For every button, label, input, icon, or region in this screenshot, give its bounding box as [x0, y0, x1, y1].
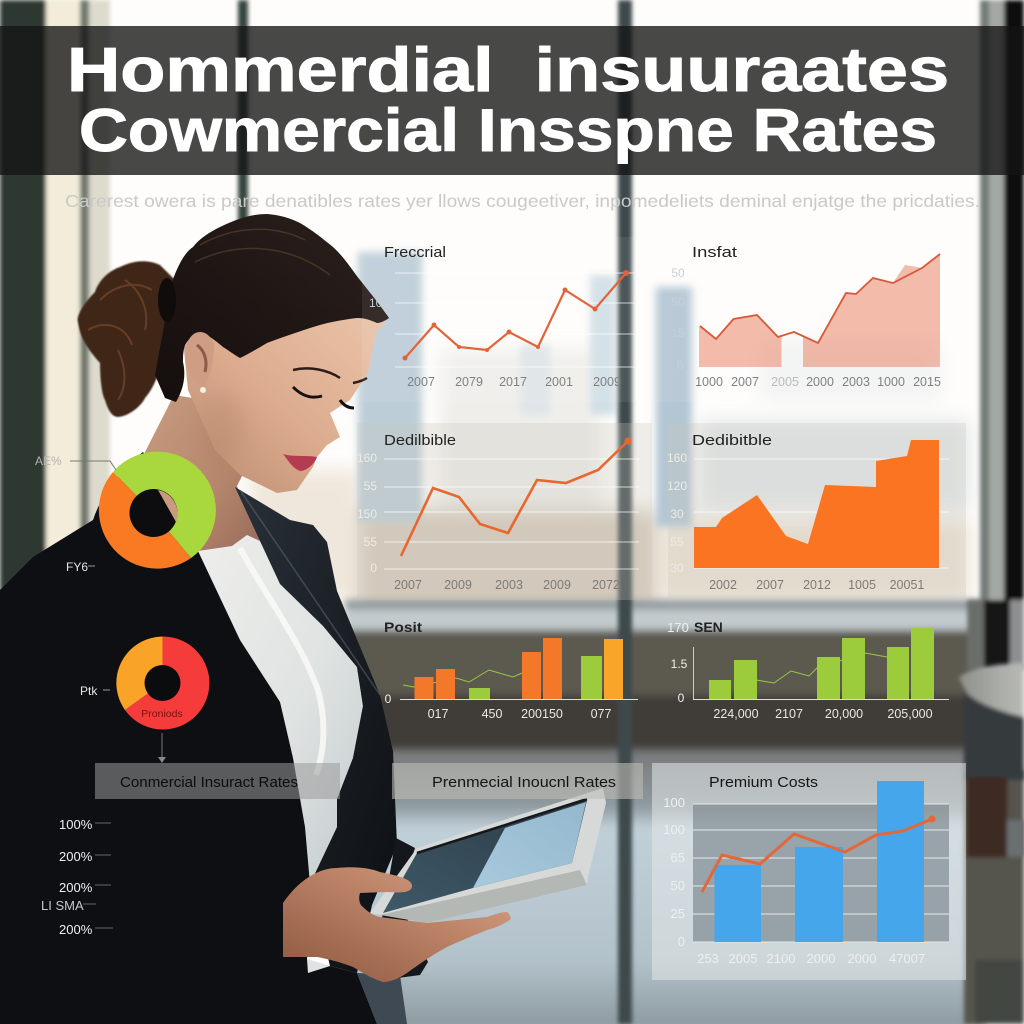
panel: Dedibitble area chart: Dedibitble	[692, 432, 772, 449]
donut chart: amber and red	[116, 636, 209, 729]
panel: Insfat area chart: 1000	[695, 375, 723, 389]
panel: SEN bar chart: 205,000	[887, 707, 933, 721]
person	[0, 214, 606, 1024]
arrow: donut to caption	[158, 733, 166, 763]
panel: Dedibitble area chart: 30	[670, 507, 684, 521]
panel: Posit bar chart: 077	[591, 707, 611, 721]
panel: Dedilbible line chart: 2009	[543, 578, 571, 592]
panel: SEN bar chart: 170	[667, 620, 689, 635]
callout: FY6: FY6	[66, 560, 88, 574]
percent legend: 200%	[59, 849, 93, 864]
panel: Premium Costs chart: 50	[671, 878, 685, 893]
panel: Freccrial line chart: 2079	[455, 375, 483, 389]
callout: AE%: AE%	[35, 454, 62, 468]
panel: Dedibitble area chart: 160	[667, 451, 687, 465]
panel: Freccrial line chart: 2009	[593, 375, 621, 389]
caption band: Commercial Insuract Rates	[95, 763, 340, 799]
panel: Freccrial line chart: 2017	[499, 375, 527, 389]
panel: Insfat area chart: 6	[677, 358, 684, 372]
callout: Ptk: Ptk	[80, 684, 98, 698]
percent legend: 100%	[59, 817, 93, 832]
panel: Premium Costs chart	[652, 763, 966, 980]
panel: SEN bar chart	[667, 619, 949, 721]
hair sheen	[195, 229, 330, 275]
caption band: Premium Inoucnl Rates: Prenmecial Inoucnl Rates	[432, 774, 616, 791]
panel: Insfat area chart: 1000	[877, 375, 905, 389]
panel: Premium Costs chart: 0	[678, 934, 685, 949]
lips	[283, 454, 317, 471]
panel: Insfat area chart: Insfat	[692, 244, 738, 261]
panel: Posit bar chart: 450	[482, 707, 502, 721]
panel: SEN bar chart: 0	[678, 691, 685, 705]
tablet	[370, 788, 606, 923]
panel: Premium Costs chart: 65	[671, 850, 685, 865]
caption band: Commercial Insuract Rates: Conmercial Insuract Rates	[120, 774, 298, 791]
subtitle: Carerest owera is pare denatibles rates yer llows cougeetiver, inpomedeliets deminal enjatge the pricdaties.	[65, 191, 980, 211]
sleeve behind tablet	[380, 838, 428, 978]
panel: Premium Costs chart: 25	[671, 906, 685, 921]
panel: Dedibitble area chart: 20051	[890, 578, 924, 592]
panel: Posit bar chart: 200150	[521, 707, 563, 721]
panel: Premium Costs chart: 47007	[889, 951, 925, 966]
panel: Dedibitble area chart: 2002	[709, 578, 737, 592]
percent legend	[41, 817, 113, 937]
panel: Premium Costs chart: 253	[697, 951, 719, 966]
blouse	[198, 535, 363, 884]
donut chart: amber and red: Proniods	[141, 708, 183, 720]
panel: Posit bar chart: 017	[428, 707, 448, 721]
jacket left	[0, 452, 377, 1024]
percent legend: 200%	[59, 922, 93, 937]
panel: Dedibitble area chart: 30	[670, 561, 684, 575]
panel: Dedibitble area chart: 120	[667, 479, 687, 493]
panel: SEN bar chart: 2107	[775, 707, 803, 721]
panel: Freccrial line chart: 100	[369, 296, 389, 310]
panel: Dedilbible line chart: 150	[357, 507, 377, 521]
face	[183, 300, 388, 493]
eyelids	[293, 387, 354, 408]
panel: Freccrial line chart: 0	[382, 358, 389, 372]
panel: Posit bar chart: Posit	[384, 619, 422, 635]
panel: Freccrial line chart	[362, 237, 640, 402]
hair	[155, 214, 389, 402]
title line 2: Cowmercial Insspne Rates	[79, 97, 937, 164]
hair tie	[158, 278, 176, 322]
panel: Insfat area chart: 2005	[771, 375, 799, 389]
panel: Premium Costs chart: 2100	[767, 951, 795, 966]
panel: Dedibitble area chart: 55	[670, 535, 684, 549]
side table	[959, 663, 1024, 857]
percent legend: LI SMA	[41, 898, 84, 913]
eyebrows	[293, 368, 367, 383]
hair bun	[78, 261, 175, 417]
panel: Freccrial line chart: 50	[376, 327, 389, 341]
panel: Insfat area chart: 2015	[913, 375, 941, 389]
panel: Dedilbible line chart	[357, 423, 652, 600]
panel: Insfat area chart: 2000	[806, 375, 834, 389]
panel: Dedibitble area chart: 1005	[848, 578, 876, 592]
panel: Freccrial line chart: 2007	[407, 375, 435, 389]
panel: Dedibitble area chart	[667, 423, 966, 600]
panel: Dedilbible line chart: 0	[370, 561, 377, 575]
panel: Freccrial line chart: 2001	[545, 375, 573, 389]
blouse hem	[307, 959, 330, 973]
ear	[186, 332, 214, 387]
panel: Freccrial line chart: 150	[369, 266, 389, 280]
panel: Insfat area chart: 50	[671, 295, 685, 309]
panel: Insfat area chart: 2007	[731, 375, 759, 389]
callout: AE%	[35, 454, 116, 470]
panel: SEN bar chart: SEN	[694, 619, 723, 635]
panel: Dedilbible line chart: 2003	[495, 578, 523, 592]
panel: SEN bar chart: 224,000	[713, 707, 759, 721]
panel: Premium Costs chart: Premium Costs	[709, 774, 818, 791]
panel: Dedilbible line chart: 55	[364, 479, 377, 493]
hand	[283, 867, 511, 982]
panel: Premium Costs chart: 100	[663, 795, 685, 810]
panel: Posit bar chart: 0	[385, 692, 392, 706]
panel: Insfat area chart: 15	[671, 326, 685, 340]
neck	[143, 395, 262, 556]
panel: Premium Costs chart: 2005	[729, 951, 757, 966]
lower jacket panel	[357, 973, 407, 1024]
panel: Premium Costs chart: 100	[663, 822, 685, 837]
title line 1: Hommerdial insuuraates	[67, 36, 949, 105]
panel: Premium Costs chart: 2000	[807, 951, 835, 966]
panel: Insfat area chart	[655, 237, 965, 402]
panel: SEN bar chart: 20,000	[825, 707, 863, 721]
panel: Dedilbible line chart: 2072	[592, 578, 620, 592]
panel: Insfat area chart: 2003	[842, 375, 870, 389]
earring	[200, 387, 206, 393]
title band	[0, 26, 1024, 175]
panel: Dedilbible line chart: 160	[357, 451, 377, 465]
bun highlights	[88, 280, 152, 400]
blouse fold	[240, 548, 323, 775]
panel: Dedilbible line chart: Dedilbible	[384, 432, 456, 449]
lapel highlight	[240, 490, 380, 695]
panel: Dedibitble area chart: 2012	[803, 578, 831, 592]
panel: Posit bar chart	[384, 619, 638, 721]
caption band: Premium Inoucnl Rates	[392, 763, 643, 799]
panel: Insfat area chart: 50	[671, 266, 685, 280]
panel: Premium Costs chart: 2000	[848, 951, 876, 966]
panel: Dedibitble area chart: 2007	[756, 578, 784, 592]
callout: Ptk	[80, 684, 110, 698]
inner ear	[197, 345, 206, 372]
panel: Dedilbible line chart: 55	[364, 535, 377, 549]
panel: Freccrial line chart: Freccrial	[384, 244, 446, 261]
percent legend: 200%	[59, 880, 93, 895]
donut chart: green and orange	[99, 452, 216, 569]
panel: Dedilbible line chart: 2009	[444, 578, 472, 592]
panel: SEN bar chart: 1.5	[671, 657, 688, 671]
panel: Dedilbible line chart: 2007	[394, 578, 422, 592]
jacket right lapel	[235, 487, 397, 973]
cheek shade	[200, 394, 244, 466]
